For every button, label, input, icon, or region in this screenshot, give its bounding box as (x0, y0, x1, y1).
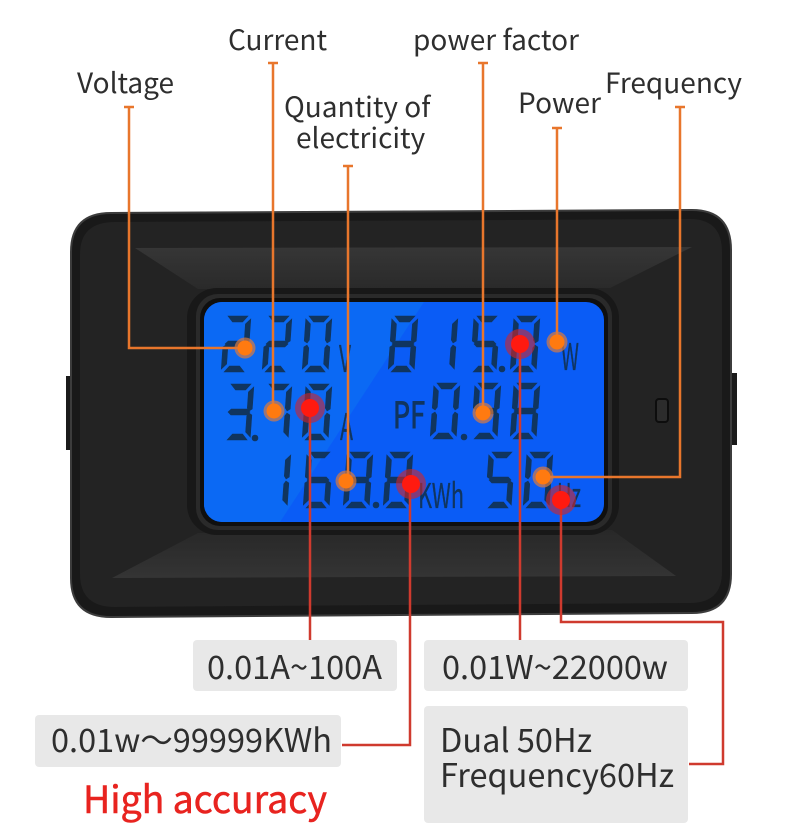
LCD reading: power factor PF 0.98 (393, 383, 540, 440)
callout: current range: 0.01A~100A (207, 642, 382, 689)
label: power factor: power factor (413, 19, 579, 59)
label: Quantity of electricity: electricity (296, 117, 426, 157)
label: Current: Current (228, 19, 327, 59)
callout: dual frequency (424, 706, 688, 823)
LCD reading: power 8 15.0 W: W (561, 327, 579, 381)
red leader lines (310, 345, 723, 764)
LCD reading: current 3.70 A (226, 384, 353, 451)
label: Frequency: Frequency (605, 62, 742, 102)
heading: High accuracy: High accuracy (83, 769, 327, 824)
orange leader lines (124, 63, 685, 480)
callout: energy range: 0.01w～99999KWh (51, 715, 332, 762)
device: meter body (66, 209, 737, 618)
orange marker dots (234, 332, 568, 492)
LCD screen (204, 302, 604, 522)
LCD reading: current 3.70 A: A (340, 397, 353, 451)
red marker dots (295, 329, 576, 515)
LCD reading: frequency 50 Hz: Hz (557, 469, 581, 517)
label: Power: Power (518, 82, 601, 122)
LCD reading: power 8 15.0 W (388, 316, 579, 381)
callout: dual frequency: Dual 50Hz (440, 715, 592, 762)
LCD reading: energy 168.8 KWh (282, 452, 464, 518)
label: Voltage: Voltage (77, 62, 174, 102)
LCD reading: energy 168.8 KWh: KWh (418, 469, 464, 518)
callout: dual frequency: Frequency60Hz (440, 750, 674, 797)
LCD reading: voltage 220 V (221, 316, 351, 383)
callout: power range: 0.01W~22000w (442, 642, 668, 689)
LCD reading: power factor PF 0.98: PF (393, 387, 425, 439)
LCD reading: frequency 50 Hz (485, 452, 581, 517)
icon: reset button (656, 399, 668, 422)
LCD reading: voltage 220 V: V (339, 329, 351, 383)
label: Quantity of electricity: Quantity of (284, 86, 431, 126)
